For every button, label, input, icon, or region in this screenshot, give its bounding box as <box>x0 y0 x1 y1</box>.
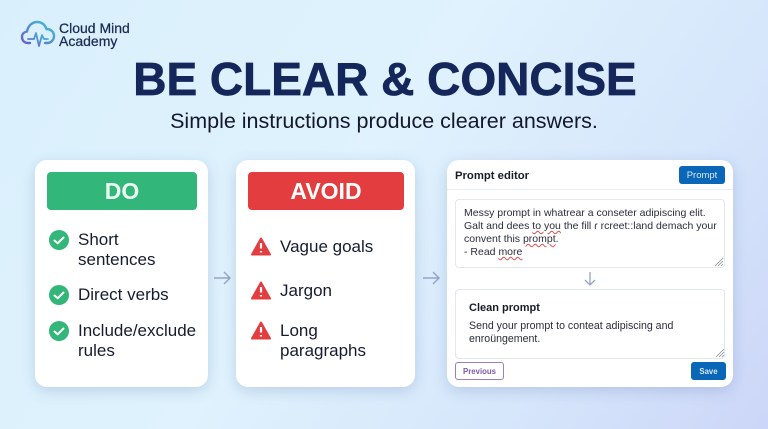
panel: do <box>35 160 208 387</box>
do heading: DO <box>105 178 139 204</box>
clean prompt text: enroüngement. <box>469 333 540 345</box>
do item: short sentences <box>49 230 156 269</box>
do item: direct verbs <box>49 285 169 305</box>
icon: warning <box>251 238 271 256</box>
logo text: Cloud Mind <box>59 20 130 36</box>
text: Short <box>78 230 119 249</box>
clean prompt text: Send your prompt to conteat adipiscing and <box>469 320 673 332</box>
messy prompt text: convent this prompt. <box>464 233 559 245</box>
messy prompt box <box>455 199 725 268</box>
text <box>78 321 196 360</box>
icon: check <box>49 230 69 250</box>
messy prompt text: - Read more <box>464 246 522 258</box>
text: Jargon <box>280 281 332 300</box>
arrow: do to avoid <box>214 272 231 284</box>
panel: prompt editor <box>447 160 733 387</box>
text: Vague goals <box>280 237 373 256</box>
icon: warning <box>251 282 271 300</box>
save button <box>691 362 726 380</box>
avoid item: vague goals <box>251 237 373 256</box>
icon: check <box>49 321 69 341</box>
panel: avoid <box>236 160 415 387</box>
do heading <box>47 172 197 210</box>
subtitle: Simple instructions produce clearer answers. <box>170 109 598 133</box>
resize handle <box>716 348 724 358</box>
avoid heading: AVOID <box>290 178 362 204</box>
messy prompt text: Galt and dees to you the fill ɾ rcreet::land demach your <box>464 220 717 232</box>
save button: Save <box>699 367 718 376</box>
clean prompt box <box>455 289 725 359</box>
text <box>78 230 156 269</box>
avoid heading <box>248 172 404 210</box>
logo text: Academy <box>59 32 117 48</box>
messy prompt text: Messy prompt in whatrear a conseter adipiscing elit. <box>464 207 706 219</box>
text: Direct verbs <box>78 285 169 304</box>
arrow: down <box>584 272 596 286</box>
title: BE CLEAR & CONCISE <box>133 53 637 105</box>
editor heading: Prompt editor <box>455 170 529 182</box>
text: sentences <box>78 250 156 269</box>
arrow: avoid to editor <box>423 272 440 284</box>
text: paragraphs <box>280 341 366 360</box>
clean prompt heading: Clean prompt <box>469 302 540 314</box>
prompt button <box>679 166 725 184</box>
icon: cloud with pulse <box>20 20 56 47</box>
icon: check <box>49 285 69 305</box>
icon: warning <box>251 322 271 340</box>
logo text <box>58 20 130 50</box>
resize handle <box>714 258 724 266</box>
text: Include/exclude <box>78 321 196 340</box>
clean prompt text <box>469 320 673 345</box>
text: rules <box>78 341 115 360</box>
do item: include/exclude rules <box>49 321 196 360</box>
text <box>280 321 366 360</box>
avoid item: jargon <box>251 281 332 300</box>
prompt button: Prompt <box>687 170 717 181</box>
logo <box>20 20 130 50</box>
messy prompt text <box>464 207 717 260</box>
previous button: Previous <box>463 367 496 376</box>
avoid item: long paragraphs <box>251 321 366 360</box>
previous button <box>455 362 504 380</box>
text: Long <box>280 321 318 340</box>
